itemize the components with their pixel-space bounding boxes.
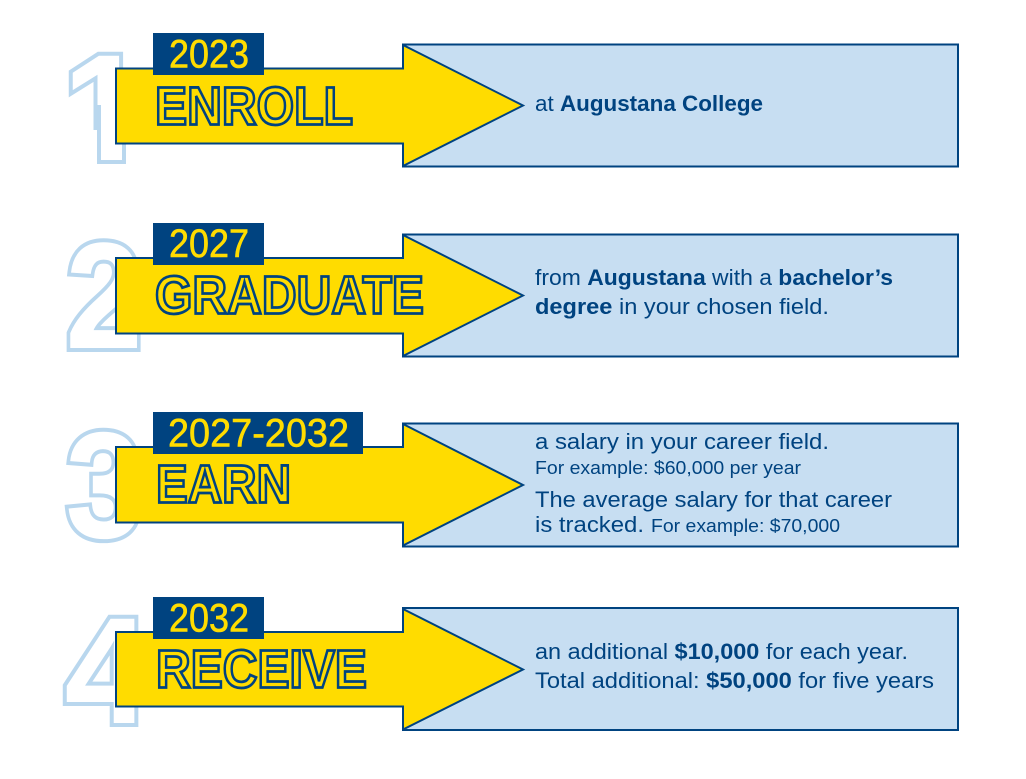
panel: earn description xyxy=(403,424,958,546)
panel: enroll description xyxy=(403,44,958,166)
step 2: graduate xyxy=(66,212,958,380)
text: receive description: Total additional: $50,000 for five years xyxy=(535,668,934,693)
large outlined numeral 4: 4 xyxy=(65,586,148,754)
heading: earn: EARN xyxy=(156,454,291,514)
large outlined numeral 3: 3 xyxy=(66,401,142,569)
year label 2032: 2032 xyxy=(169,596,249,640)
text: receive description: an additional $10,000 for each year. xyxy=(535,639,908,664)
heading: enroll: ENROLL xyxy=(155,76,353,136)
year tag 2032 xyxy=(153,597,264,639)
large outlined numeral 3: 3 xyxy=(66,401,142,569)
text: enroll description: at Augustana College xyxy=(535,91,763,116)
year tag 2027-2032 xyxy=(153,412,363,454)
year tag 2027 xyxy=(153,223,264,265)
large outlined numeral 2: 2 xyxy=(66,212,142,380)
year label 2027-2032: 2027-2032 xyxy=(168,412,349,456)
year label 2023: 2023 xyxy=(169,32,249,76)
panel: graduate description xyxy=(403,234,958,356)
text: graduate description: degree in your chosen field. xyxy=(535,294,829,319)
panel: receive description xyxy=(403,608,958,730)
text: earn description: is tracked. xyxy=(535,512,644,537)
text: earn description xyxy=(535,429,893,537)
year label 2027: 2027 xyxy=(169,222,249,266)
step 4: receive xyxy=(65,586,958,754)
large outlined numeral 4: 4 xyxy=(65,586,148,754)
arrow: enroll xyxy=(116,45,523,166)
text: graduate description: from Augustana with a bachelor’s xyxy=(535,265,893,290)
text: earn description: The average salary for that career xyxy=(535,487,893,512)
large outlined numeral 1: 1 xyxy=(63,24,146,192)
step 1: enroll xyxy=(55,24,958,192)
heading: receive: RECEIVE xyxy=(156,640,367,700)
arrow: graduate xyxy=(116,235,523,356)
large outlined numeral 2: 2 xyxy=(66,212,142,380)
text: earn description: a salary in your career field. xyxy=(535,429,829,454)
text: earn description: For example: $60,000 per year xyxy=(535,458,801,478)
arrow: earn xyxy=(116,424,523,546)
arrow: receive xyxy=(116,609,523,730)
heading: graduate: GRADUATE xyxy=(155,266,424,326)
year tag 2023 xyxy=(153,33,264,75)
text: graduate description xyxy=(535,265,893,319)
large outlined numeral 1: 1 xyxy=(63,24,146,192)
step 3: earn xyxy=(66,401,958,569)
text: receive description xyxy=(535,639,934,693)
text: earn description: For example: $70,000 xyxy=(651,516,840,536)
